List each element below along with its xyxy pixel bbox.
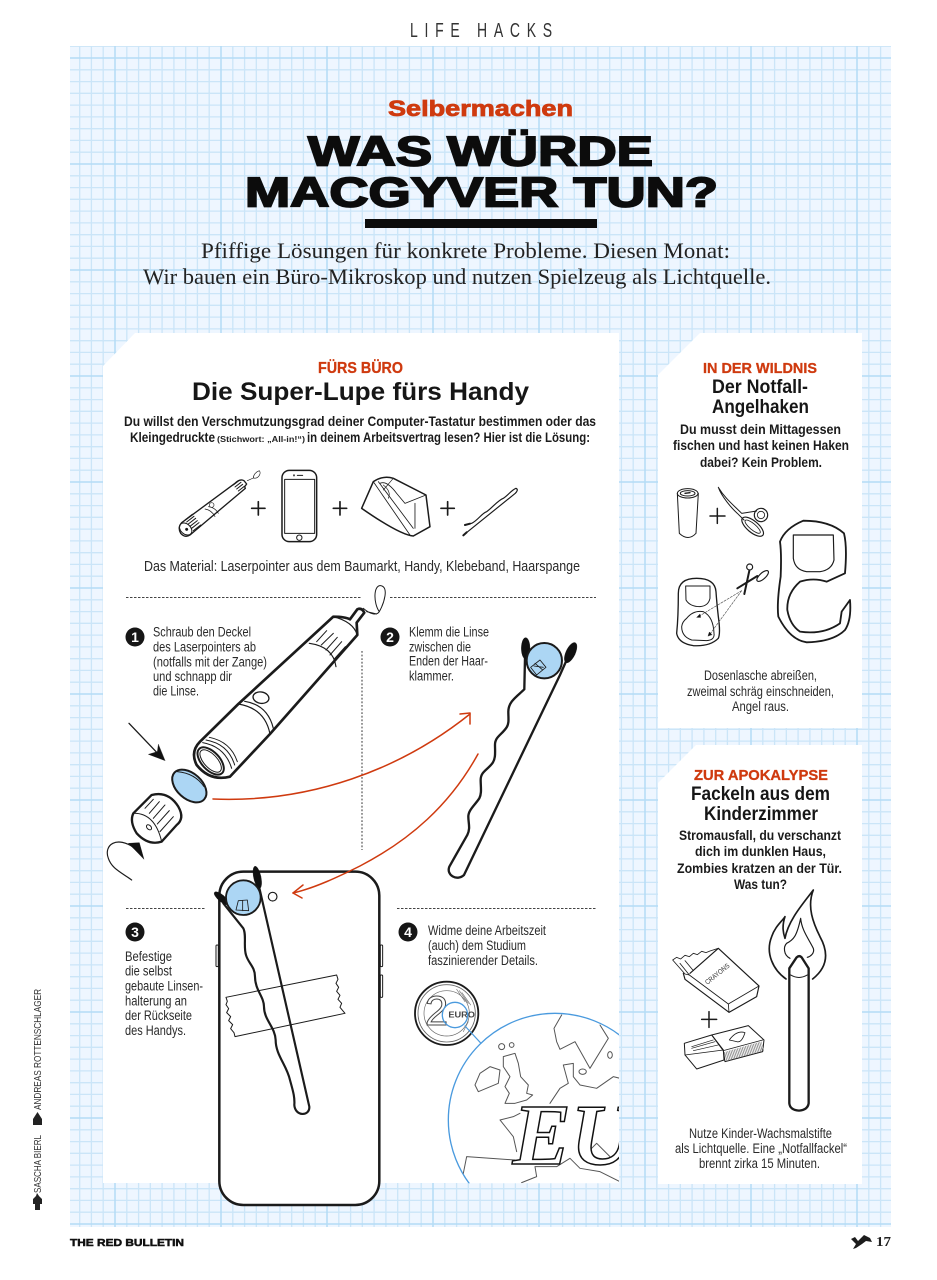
- icon: small hair pin: [463, 488, 517, 535]
- caption: Nutze Kinder-Wachsmalstifte: [689, 1126, 832, 1141]
- intro text: dabei? Kein Problem.: [700, 454, 822, 470]
- materials caption: Das Material: Laserpointer aus dem Baumarkt, Handy, Klebeband, Haarspange: [144, 559, 580, 575]
- step number 4: 4: [404, 924, 412, 940]
- step number 1: 1: [131, 629, 139, 645]
- page number: 17: [876, 1235, 891, 1250]
- step 3 text: des Handys.: [125, 1023, 186, 1038]
- step 3 text: gebaute Linsen-: [125, 978, 203, 994]
- heading: Der Notfall-: [712, 377, 808, 398]
- icon: crayon box: [673, 948, 759, 1012]
- section label: life hacks: LIFE HACKS: [410, 18, 552, 42]
- caption: Angel raus.: [732, 699, 789, 714]
- step 4 text: [428, 923, 546, 968]
- icon: match box: [684, 1026, 764, 1069]
- lens: [166, 763, 213, 809]
- arrow: pointing to lens: [129, 723, 165, 761]
- footer: magazine name: THE RED BULLETIN: [70, 1238, 184, 1249]
- step 2: [380, 624, 580, 878]
- step number 3: 3: [131, 924, 139, 940]
- materials row icons: [177, 470, 517, 542]
- euro coin: 2: [425, 987, 448, 1034]
- heading: Angelhaken: [712, 397, 809, 418]
- icon: small phone: [282, 470, 317, 542]
- screw cap: [132, 794, 181, 843]
- title: WAS WÜRDE: [308, 128, 653, 174]
- pull tab illustrations: [677, 487, 850, 646]
- icon: small scissors: [737, 564, 770, 594]
- step 1 text: die Linse.: [153, 684, 199, 698]
- icon: tape dispenser: [362, 477, 430, 536]
- phone back with lens holder: [212, 865, 383, 1205]
- panel intro text: Du willst den Verschmutzungsgrad deiner Computer-Tastatur bestimmen oder das: [124, 413, 596, 429]
- laser pointer body: [193, 609, 364, 779]
- step 2 text: [409, 624, 489, 684]
- icon: small pull tab with cuts: [677, 578, 742, 646]
- credits: ANDREAS ROTTENSCHLAGER: [33, 989, 44, 1110]
- caption: Dosenlasche abreißen,: [704, 668, 817, 683]
- arrow: lens to hair pin: [213, 713, 470, 799]
- step 2 text: Enden der Haar-: [409, 654, 488, 668]
- icon: scissors: [718, 487, 768, 540]
- keychain loop: [363, 586, 385, 614]
- step number 4: [398, 922, 418, 942]
- phone body: [216, 872, 383, 1205]
- panel: main, die Super-Lupe: [103, 333, 662, 1227]
- intro text: [677, 827, 842, 892]
- caption: als Lichtquelle. Eine „Notfallfackel“: [675, 1141, 847, 1156]
- icon: bull: [851, 1235, 872, 1249]
- torch illustrations: [673, 890, 826, 1111]
- coin and magnified map: [415, 982, 662, 1227]
- title rule: [365, 219, 597, 228]
- heading: IN DER WILDNIS: [703, 360, 817, 377]
- icon: plus: [441, 502, 454, 515]
- caption: [675, 1126, 847, 1171]
- intro text: Zombies kratzen an der Tür.: [677, 860, 842, 876]
- step 3 text: [125, 949, 203, 1038]
- map circle: [448, 1012, 619, 1184]
- panel intro text: [124, 413, 596, 445]
- intro text: Pfiffige Lösungen für konkrete Probleme. Diesen Monat:: [201, 238, 730, 263]
- step 2 text: zwischen die: [409, 640, 471, 654]
- step 4 text: faszinierender Details.: [428, 953, 538, 968]
- step 1: [107, 586, 385, 880]
- icon: plus: [702, 1012, 717, 1027]
- intro text: Wir bauen ein Büro-Mikroskop und nutzen Spielzeug als Lichtquelle.: [143, 264, 771, 289]
- step 3 text: die selbst: [125, 964, 172, 978]
- heading: Kinderzimmer: [704, 804, 819, 825]
- icon: can: [677, 489, 698, 537]
- step 2 text: klammer.: [409, 668, 454, 684]
- credits: SASCHA BIERL: [33, 1135, 44, 1193]
- heading: [703, 360, 817, 418]
- panel heading: FÜRS BÜRO: [318, 358, 403, 377]
- step 4 text: (auch) dem Studium: [428, 938, 526, 953]
- clipped hair pin: [223, 883, 309, 1114]
- intro text: [673, 421, 849, 470]
- step 1 text: Schraub den Deckel: [153, 624, 251, 640]
- panel intro text: Kleingedruckte: [130, 429, 215, 445]
- step 1 text: des Laserpointers ab: [153, 640, 256, 654]
- step 3: [125, 865, 383, 1205]
- icon: plus: [252, 502, 265, 515]
- map outlines: [463, 1015, 620, 1183]
- euro coin: EURO: [448, 1010, 475, 1019]
- icon: big pull tab hook: [778, 521, 850, 642]
- intro text: Was tun?: [734, 876, 787, 892]
- step 4: [398, 922, 619, 1184]
- header block: [143, 96, 771, 289]
- heading: [691, 767, 830, 825]
- intro text: Du musst dein Mittagessen: [680, 421, 841, 437]
- lens on phone: [226, 880, 261, 915]
- panel: in der Wildnis: [658, 333, 862, 728]
- intro text: [143, 238, 771, 289]
- step 1 text: (notfalls mit der Zange): [153, 654, 267, 670]
- panel intro text: (Stichwort: „All-in!“): [217, 435, 305, 444]
- EU lettering: EU: [512, 1086, 638, 1183]
- panel heading: Die Super-Lupe fürs Handy: [192, 378, 529, 406]
- step number 2: [380, 628, 400, 646]
- panel: zur Apokalypse: [658, 745, 862, 1184]
- icon: crayon box: CRAYONS: [704, 962, 732, 987]
- icon: pen: [33, 1112, 42, 1125]
- step 3 text: Befestige: [125, 949, 172, 964]
- caption: brennt zirka 15 Minuten.: [699, 1156, 820, 1171]
- credits: [33, 989, 44, 1210]
- intro text: dich im dunklen Haus,: [695, 843, 826, 859]
- arrow: turn cap: [107, 842, 144, 880]
- step 3 text: halterung an: [125, 994, 187, 1008]
- hair pin with lens: [449, 638, 580, 878]
- step number 3: [126, 922, 144, 942]
- icon: plus: [333, 502, 347, 515]
- intro text: Stromausfall, du verschanzt: [679, 827, 841, 843]
- tape strip: [226, 975, 345, 1037]
- step 3 text: der Rückseite: [125, 1008, 192, 1023]
- panel intro text: in deinem Arbeitsvertrag lesen? Hier ist die Lösung:: [307, 429, 590, 445]
- icon: burning crayon: [769, 890, 826, 1111]
- heading: Fackeln aus dem: [691, 784, 830, 805]
- caption: zweimal schräg einschneiden,: [687, 684, 834, 699]
- icon: small laser pointer: [177, 471, 260, 537]
- step 2 text: Klemm die Linse: [409, 624, 489, 640]
- intro text: fischen und hast keinen Haken: [673, 437, 849, 453]
- laser pointer taken apart: [107, 586, 385, 880]
- caption: [687, 668, 834, 714]
- title: MACGYVER TUN?: [245, 168, 718, 216]
- panel heading: [192, 358, 529, 406]
- icon: plus: [710, 508, 725, 523]
- title: [245, 128, 718, 216]
- heading: ZUR APOKALYPSE: [694, 767, 828, 784]
- step 1 text: und schnapp dir: [153, 669, 232, 684]
- euro coin: [415, 982, 478, 1045]
- step 4 text: Widme deine Arbeitszeit: [428, 923, 546, 938]
- kicker: Selbermachen: [388, 96, 573, 121]
- magnifier connector: [442, 1002, 481, 1043]
- icon: person: [33, 1193, 42, 1210]
- step number 2: 2: [386, 629, 394, 645]
- step 1 text: [153, 624, 267, 698]
- step number 1: [126, 628, 144, 646]
- arrow: hair pin to phone: [293, 754, 478, 898]
